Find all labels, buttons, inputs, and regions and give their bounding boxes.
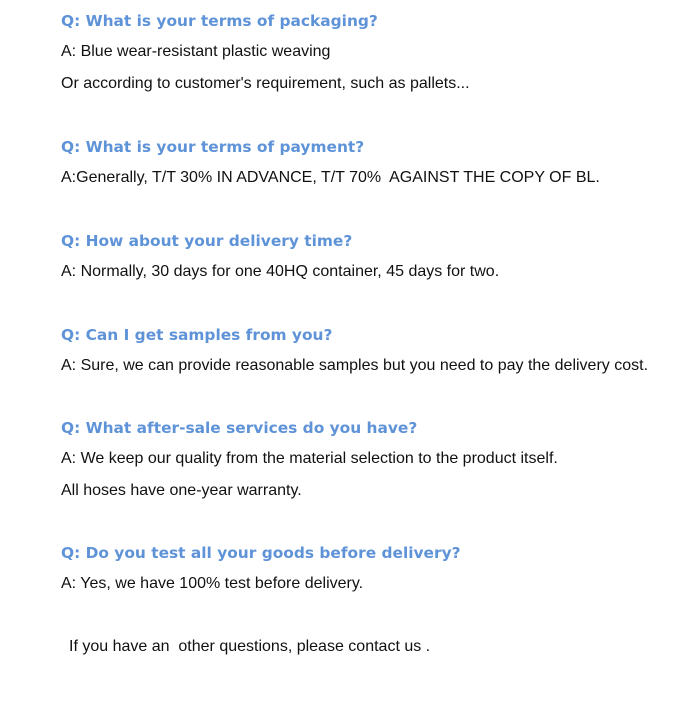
- question: delivery time: Q: How about your delivery time?: [61, 232, 352, 250]
- question: samples: Q: Can I get samples from you?: [61, 326, 332, 344]
- closing note: If you have an other questions, please contact us .: [69, 638, 430, 655]
- answer: after-sale: A: We keep our quality from the material selection to the product itself.: [61, 450, 558, 467]
- answer: after-sale line 2: All hoses have one-year warranty.: [61, 482, 302, 499]
- answer: packaging: A: Blue wear-resistant plastic weaving: [61, 43, 330, 60]
- question: after-sale: Q: What after-sale services do you have?: [61, 419, 417, 437]
- question: packaging: Q: What is your terms of packaging?: [61, 12, 378, 30]
- question: payment: Q: What is your terms of payment?: [61, 138, 364, 156]
- answer: testing: A: Yes, we have 100% test before delivery.: [61, 575, 363, 592]
- answer: packaging line 2: Or according to customer's requirement, such as pallets...: [61, 75, 470, 92]
- answer: samples: A: Sure, we can provide reasonable samples but you need to pay the delivery cost.: [61, 357, 648, 374]
- answer: payment: A:Generally, T/T 30% IN ADVANCE, T/T 70% AGAINST THE COPY OF BL.: [61, 169, 600, 186]
- answer: delivery time: A: Normally, 30 days for one 40HQ container, 45 days for two.: [61, 263, 499, 280]
- question: testing: Q: Do you test all your goods before delivery?: [61, 544, 461, 562]
